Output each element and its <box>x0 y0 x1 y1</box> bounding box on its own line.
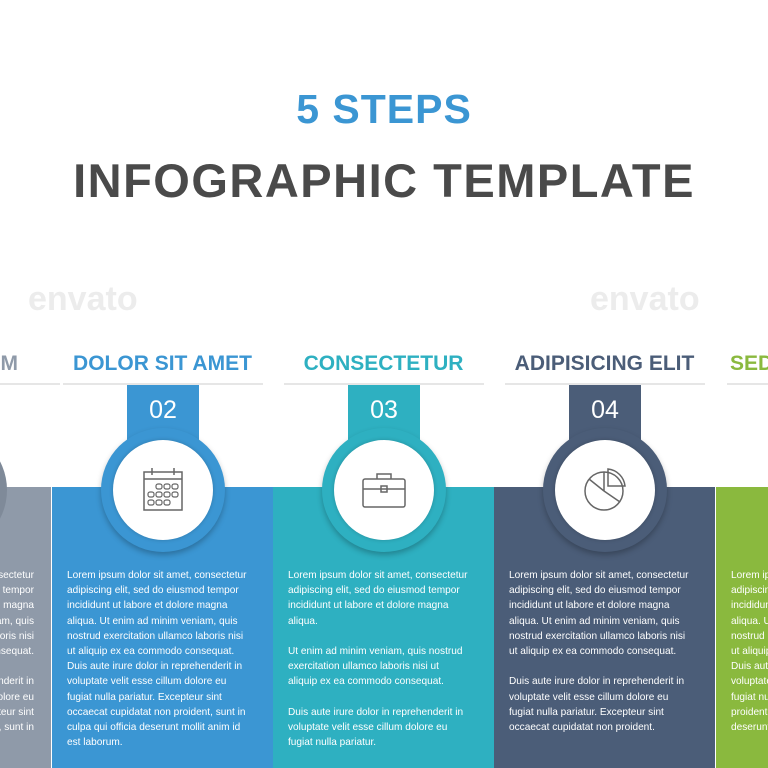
column 2 blue <box>52 487 273 768</box>
text column 5 partial: proident <box>731 707 767 718</box>
column 4 navy <box>494 487 715 768</box>
text column 5 partial: nostrud <box>731 631 765 642</box>
step 4 badge: 04 <box>591 396 619 424</box>
text column 2: aliqua. Ut enim ad minim veniam, quis <box>67 616 238 627</box>
text column 2: nostrud exercitation ullamco laboris nisi <box>67 631 243 642</box>
text column 3: aliquip ex ea commodo consequat. <box>288 676 444 687</box>
text column 2: ut aliquip ex ea commodo consequat. <box>67 646 234 657</box>
column 3 teal <box>273 487 494 768</box>
icon: calendar <box>143 468 183 511</box>
text column 2: fugiat nulla pariatur. Excepteur sint <box>67 692 222 703</box>
title line 2: INFOGRAPHIC TEMPLATE <box>73 154 695 207</box>
text column 2: est laborum. <box>67 737 123 748</box>
text column 4: ut aliquip ex ea commodo consequat. <box>509 646 676 657</box>
text column 4: Duis aute irure dolor in reprehenderit in <box>509 676 684 687</box>
header 3: CONSECTETUR <box>304 352 463 375</box>
watermark left: envato <box>28 280 138 318</box>
text column 4: Lorem ipsum dolor sit amet, consectetur <box>509 570 689 581</box>
text column 5 partial <box>731 570 768 733</box>
text column 2: Duis aute irure dolor in reprehenderit in <box>67 661 242 672</box>
text column 4: occaecat cupidatat non proident. <box>509 722 655 733</box>
title line 1: 5 STEPS <box>296 86 472 132</box>
text column 3: Ut enim ad minim veniam, quis nostrud <box>288 646 462 657</box>
text column 1 partial <box>0 570 34 733</box>
step 2 badge <box>98 385 228 558</box>
column 5 green <box>716 487 768 768</box>
step 3 badge <box>320 385 448 558</box>
text column 2: culpa qui officia deserunt mollit anim id <box>67 722 240 733</box>
step 2 badge: 02 <box>149 396 177 424</box>
text column 2: occaecat cupidatat non proident, sunt in <box>67 707 245 718</box>
text column 4: incididunt ut labore et dolore magna <box>509 600 670 611</box>
icon: briefcase <box>362 473 406 508</box>
text column 3: adipiscing elit, sed do eiusmod tempor <box>288 585 460 596</box>
text column 4: nostrud exercitation ullamco laboris nisi <box>509 631 685 642</box>
text column 2: incididunt ut labore et dolore magna <box>67 600 228 611</box>
step 1 partial badge <box>0 428 7 552</box>
text column 4: aliqua. Ut enim ad minim veniam, quis <box>509 616 680 627</box>
text column 4: voluptate velit esse cillum dolore eu <box>509 692 668 703</box>
icon: pie chart <box>584 468 626 511</box>
text column 4: fugiat nulla pariatur. Excepteur sint <box>509 707 664 718</box>
text column 3: fugiat nulla pariatur. <box>288 737 376 748</box>
header 4: ADIPISICING ELIT <box>515 352 694 375</box>
text column 3: voluptate velit esse cillum dolore eu <box>288 722 447 733</box>
text column 3: Lorem ipsum dolor sit amet, consectetur <box>288 570 468 581</box>
step 4 badge <box>540 385 670 556</box>
step 3 badge: 03 <box>370 396 398 424</box>
text column 3: incididunt ut labore et dolore magna <box>288 600 448 611</box>
text column 2: voluptate velit esse cillum dolore eu <box>67 676 226 687</box>
watermark right: envato <box>590 280 700 318</box>
text column 3 <box>288 570 468 748</box>
text column 4 <box>509 570 689 733</box>
text column 4: adipiscing elit, sed do eiusmod tempor <box>509 585 681 596</box>
header 2: DOLOR SIT AMET <box>73 352 252 375</box>
text column 2: Lorem ipsum dolor sit amet, consectetur <box>67 570 247 581</box>
text column 3: exercitation ullamco laboris nisi ut <box>288 661 439 672</box>
text column 3: Duis aute irure dolor in reprehenderit in <box>288 707 463 718</box>
text column 3: aliqua. <box>288 616 318 627</box>
column 1 gray <box>0 487 51 768</box>
text column 2 <box>67 570 247 748</box>
text column 2: adipiscing elit, sed do eiusmod tempor <box>67 585 239 596</box>
